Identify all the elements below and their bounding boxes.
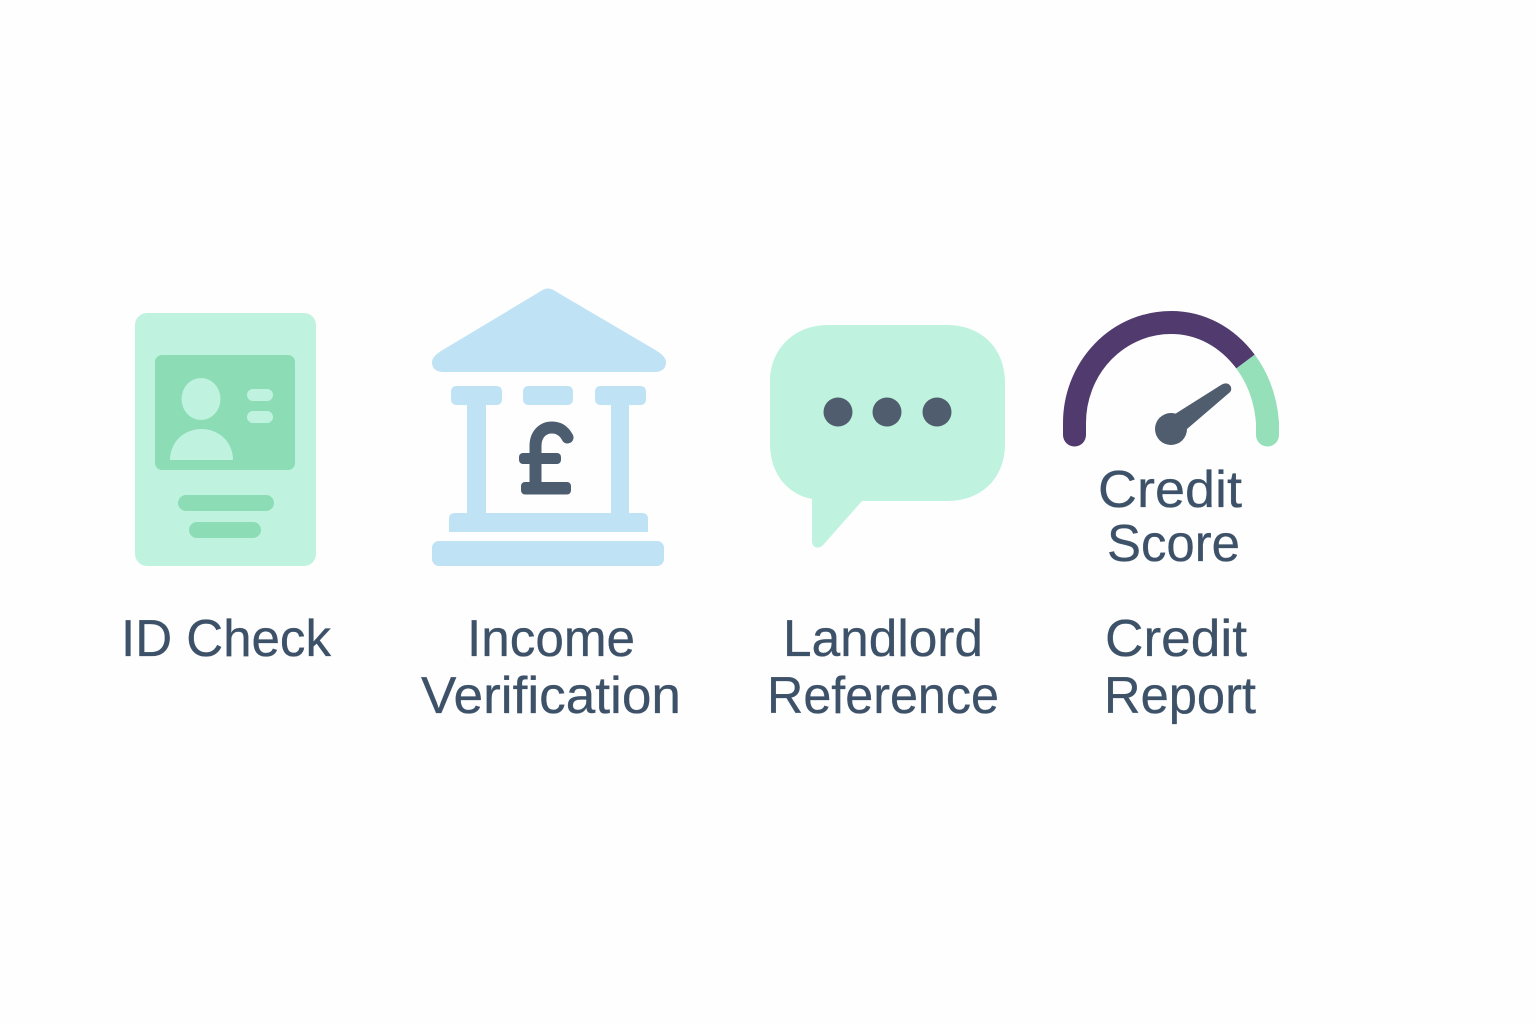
green arc segment <box>1246 362 1268 435</box>
columns <box>467 405 629 513</box>
gauge caption: Score <box>1107 515 1240 573</box>
label: Credit Report: Credit <box>1105 610 1248 668</box>
gauge caption: Credit <box>1098 461 1243 519</box>
detail pill upper <box>247 389 273 401</box>
needle hub <box>1155 413 1187 445</box>
portrait shoulders <box>170 429 233 460</box>
label: Income Verification: Income <box>467 610 635 668</box>
portrait head <box>182 378 220 420</box>
icon: credit score gauge <box>1063 322 1279 446</box>
label: Income Verification: Verification <box>421 667 681 725</box>
short bar <box>189 522 261 538</box>
icon: speech bubble <box>770 325 1005 548</box>
column capitals <box>451 386 646 405</box>
label: Credit Report <box>1104 610 1257 725</box>
purple arc segment <box>1074 322 1246 435</box>
label: Credit Report: Report <box>1104 667 1257 725</box>
label: ID Check: ID Check <box>121 610 332 668</box>
label: Landlord Reference: Reference <box>767 667 999 725</box>
purple arc end cap <box>1063 424 1086 446</box>
needle <box>1175 383 1231 429</box>
bubble <box>770 325 1005 548</box>
icon: ID card <box>135 313 316 566</box>
icon: bank with pound sign <box>432 288 666 566</box>
label: Landlord Reference: Landlord <box>783 610 983 668</box>
photo panel <box>155 355 295 470</box>
detail pill lower <box>247 411 273 423</box>
gauge caption <box>1098 461 1243 573</box>
lower plinth <box>432 541 664 566</box>
dot 2 <box>872 398 902 426</box>
card body <box>135 313 316 566</box>
label: Income Verification <box>421 610 681 725</box>
long bar <box>178 495 274 511</box>
roof <box>432 288 666 372</box>
dot 3 <box>922 398 952 426</box>
dot 1 <box>824 398 852 426</box>
label: Landlord Reference <box>767 610 999 725</box>
pound sign <box>519 428 571 494</box>
upper plinth <box>449 513 648 532</box>
green arc end cap <box>1256 424 1279 446</box>
